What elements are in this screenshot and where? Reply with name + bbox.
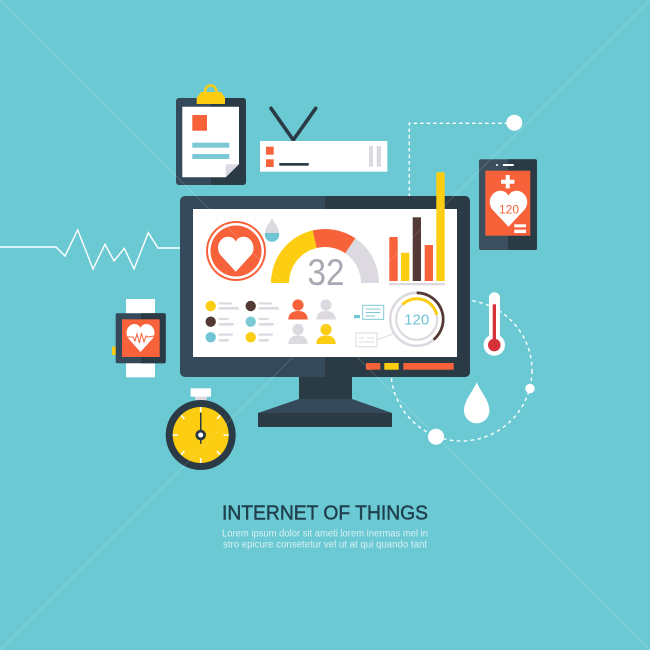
ring chart value: 120 (404, 312, 429, 328)
heartbeat line (0, 230, 180, 269)
ring chart (390, 293, 443, 346)
description text (222, 529, 428, 551)
icon: smartphone (479, 159, 537, 250)
monitor stand (258, 377, 392, 427)
icon: thermometer (484, 292, 505, 356)
monitor screen (193, 209, 457, 357)
title: INTERNET OF THINGS (222, 502, 428, 524)
icon: smartwatch (112, 299, 166, 377)
dashed connector to phone (409, 115, 522, 197)
icon: heart badge (206, 221, 266, 281)
icon: clipboard (176, 86, 246, 185)
message callouts (354, 305, 393, 347)
legend list (206, 301, 279, 342)
description text: Lorem ipsum dolor sit ameti lorem inermas mel in (222, 529, 428, 540)
dashed sensor orbit (391, 300, 535, 445)
people icons (288, 299, 336, 344)
bar chart (389, 172, 445, 285)
icon: wifi router (260, 108, 387, 172)
gauge chart (271, 229, 379, 293)
gauge value: 32 (308, 252, 344, 293)
icon: stopwatch (166, 388, 236, 470)
icon: smartphone: 120 (499, 202, 519, 216)
monitor status buttons (366, 363, 454, 370)
monitor (180, 196, 470, 377)
icon: large water drop (464, 382, 489, 423)
description text: stro epicure consetetur vel ut at qui quando tant (223, 540, 427, 551)
icon: small water drop (265, 218, 279, 242)
